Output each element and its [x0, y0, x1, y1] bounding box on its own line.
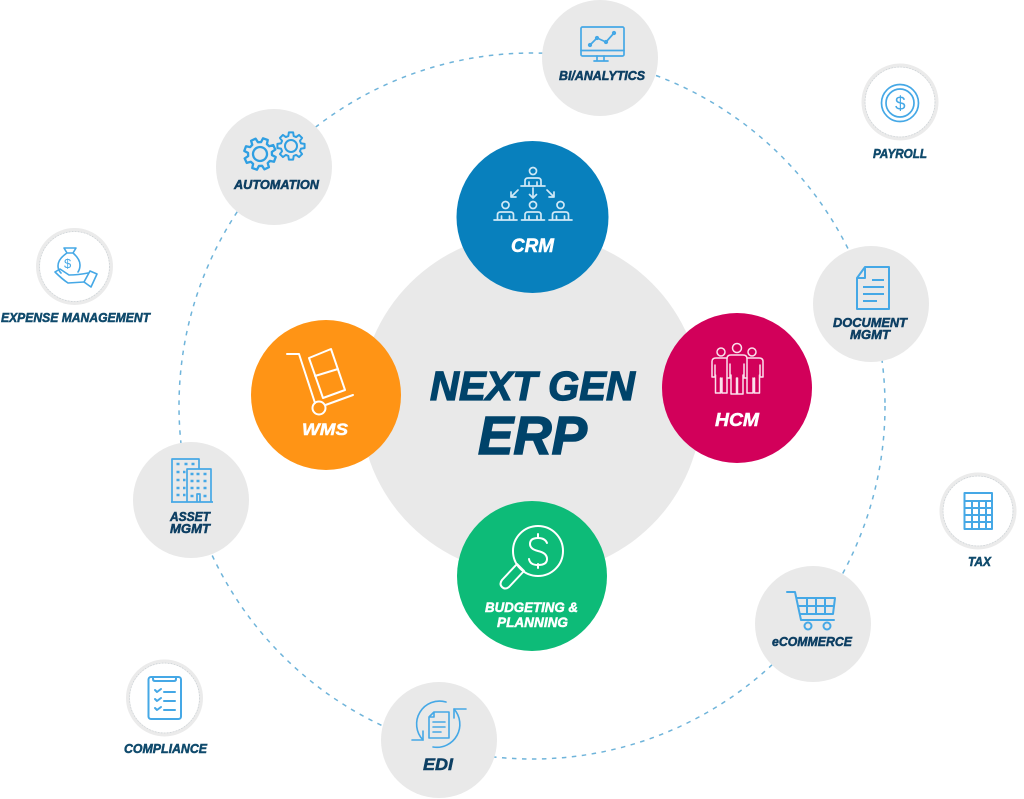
- panel: CRM: [456, 141, 608, 293]
- label: BI/analytics: BI/ANALYTICS: [559, 69, 646, 83]
- icon: money bag in hand: $: [64, 256, 72, 271]
- label: asset mgmt: MGMT: [170, 522, 211, 536]
- icon: office buildings: [171, 459, 213, 502]
- label: budgeting and planning: PLANNING: [497, 614, 568, 630]
- icon: checklist clipboard: [148, 677, 181, 719]
- label: document mgmt: MGMT: [850, 328, 891, 342]
- dashed orbit ring: [179, 53, 885, 759]
- icon: document exchange: [412, 701, 466, 747]
- panel: document management: [813, 246, 929, 362]
- panel: asset management: [133, 442, 249, 558]
- panel: compliance: [124, 662, 208, 756]
- label: payroll: PAYROLL: [873, 147, 927, 161]
- panel: HCM: [662, 313, 812, 463]
- panel: expense management: [1, 230, 151, 325]
- label: document mgmt: DOCUMENT: [833, 316, 908, 330]
- title: next gen erp: [430, 363, 636, 466]
- icon: gears: [240, 132, 305, 174]
- panel: EDI: [381, 682, 497, 798]
- panel: payroll: [864, 66, 936, 161]
- label: eCommerce: eCOMMERCE: [772, 635, 853, 649]
- label: compliance: COMPLIANCE: [124, 742, 208, 756]
- label: EDI: EDI: [423, 755, 454, 774]
- icon: hand truck: [287, 349, 353, 414]
- icon: dollar coin: $: [895, 94, 906, 115]
- panel: eCommerce: [755, 566, 871, 682]
- panel: automation: [216, 109, 332, 225]
- label: expense management: EXPENSE MANAGEMENT: [1, 311, 151, 325]
- icon: money bag in hand: [55, 248, 97, 287]
- icon: shopping cart: [787, 592, 835, 630]
- panel: tax: [942, 474, 1014, 569]
- icon: org chart: [494, 168, 572, 220]
- label: CRM: CRM: [511, 236, 555, 257]
- label: budgeting and planning: BUDGETING &: [485, 599, 578, 615]
- icon: monitor with line chart: [581, 27, 624, 61]
- title: next gen erp: NEXT GEN: [430, 363, 636, 409]
- icon: document: [857, 267, 889, 309]
- label: WMS: WMS: [302, 420, 349, 439]
- panel: budgeting and planning: [457, 501, 607, 651]
- central hub circle: [360, 233, 702, 575]
- label: automation: AUTOMATION: [233, 178, 320, 192]
- label: asset mgmt: [169, 510, 211, 536]
- icon: team of people: [712, 344, 763, 394]
- label: budgeting and planning: [485, 599, 578, 630]
- icon: calculator: [964, 493, 992, 529]
- panel: BI analytics: [542, 0, 658, 116]
- label: asset mgmt: ASSET: [169, 510, 211, 524]
- title: next gen erp: ERP: [478, 406, 588, 466]
- label: HCM: HCM: [715, 410, 760, 430]
- label: document mgmt: [833, 316, 908, 342]
- icon: magnifier with dollar: [500, 526, 563, 588]
- panel: WMS: [251, 320, 401, 470]
- label: tax: TAX: [968, 555, 992, 569]
